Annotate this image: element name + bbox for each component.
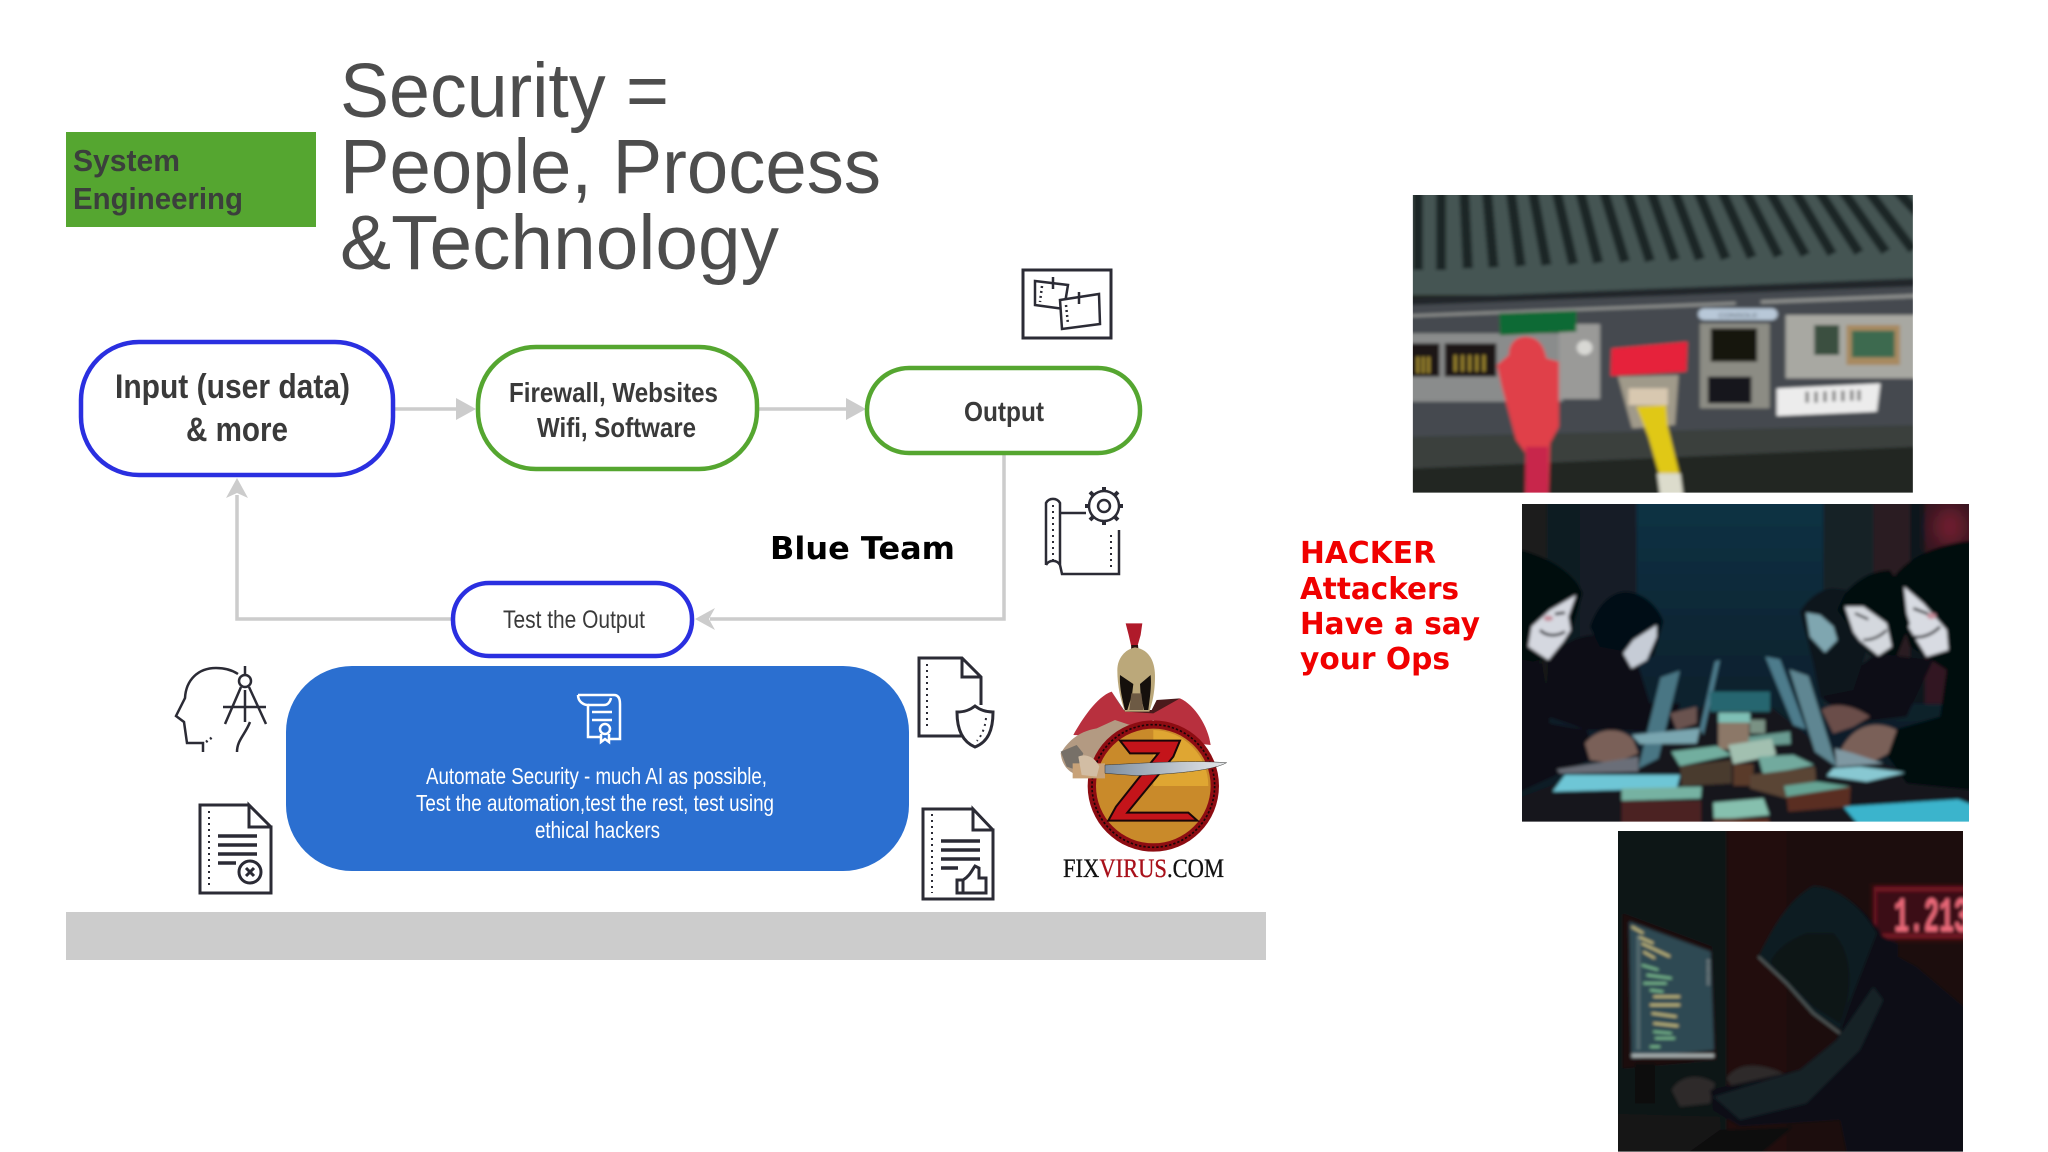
router vented lid (1412, 195, 1913, 298)
tag: System Engineering (66, 132, 316, 227)
callout: hacker attackers: your Ops (1300, 642, 1450, 677)
money stacks (1622, 692, 1851, 838)
icon: head with compass (176, 666, 266, 752)
callout: hacker attackers: Have a say (1300, 607, 1480, 642)
title: People, Process (340, 124, 881, 210)
hacker second left (1547, 592, 1697, 732)
hacker far left (1522, 550, 1640, 790)
hacker back right (1800, 588, 1867, 697)
hacker second right (1820, 570, 1933, 733)
back wall panels (1522, 504, 1969, 706)
panel text (416, 763, 774, 843)
node: Firewall, Websites, Wifi, Software (478, 347, 757, 469)
shield Z letter (1108, 741, 1197, 821)
yellow cable (1636, 405, 1685, 510)
bottom grey bar (66, 912, 1266, 960)
node: Test the Output (453, 583, 692, 656)
laptop right back (1765, 657, 1806, 729)
spartan hand and sword (1073, 763, 1105, 778)
node: Input (user data) & more (81, 342, 393, 475)
label: Blue Team: Blue Team (770, 531, 955, 567)
node: Output (867, 368, 1140, 453)
hacker far right (1838, 540, 1969, 791)
spartan cape (1073, 692, 1211, 745)
spartan arm (1061, 720, 1130, 775)
node: Firewall, Websites, Wifi, Software: Wifi, Software (537, 412, 696, 443)
title (340, 48, 881, 286)
node: Output: Output (964, 396, 1044, 427)
hands (1672, 1066, 1783, 1107)
logo: FixVirus spartan: FIXVIRUS.COM (1063, 854, 1224, 883)
green tape (1499, 311, 1576, 335)
node: Firewall, Websites, Wifi, Software: Firewall, Websites (509, 377, 718, 408)
icon: scroll with gear (1046, 487, 1123, 574)
helmet plume (1126, 623, 1142, 647)
panel text: Test the automation,test the rest, test using (416, 790, 774, 816)
callout: hacker attackers: Attackers (1300, 572, 1459, 607)
node: Test the Output: Test the Output (503, 606, 645, 634)
red tape (1611, 342, 1687, 376)
node: Input (user data) & more: Input (user data) (115, 368, 350, 406)
wall clock: 1.213 (1894, 891, 1969, 948)
router front panel: CONSOLE (1719, 313, 1758, 319)
arrow: test the output back to input (226, 478, 453, 619)
laptop right front (1789, 669, 1883, 767)
arrow: firewall to output (758, 398, 866, 420)
title: &Technology (340, 200, 779, 286)
photo: router with cables (1412, 195, 1913, 493)
tag: System Engineering: Engineering (73, 181, 243, 216)
hooded figure (1710, 886, 1980, 1152)
arrow: input to firewall (394, 398, 476, 420)
panel: automate security (286, 666, 909, 871)
icon: document with shield (919, 658, 993, 747)
panel text: Automate Security - much AI as possible, (426, 763, 767, 789)
tag: System Engineering: System (73, 143, 180, 178)
monitor (1623, 913, 1717, 1103)
desk and keyboard (1618, 1114, 1788, 1152)
wall clock (1867, 883, 1963, 945)
icon: certificate scroll (578, 695, 620, 742)
icon: sticky notes (1023, 270, 1111, 338)
laptop left back (1632, 660, 1720, 744)
node: Input (user data) & more: & more (186, 411, 288, 449)
helmet (1117, 647, 1155, 712)
laptop left front (1557, 671, 1680, 773)
arrow: output to test the output (695, 453, 1004, 630)
photo: hooded hacker at monitor (1618, 831, 1963, 1152)
red cable (1497, 337, 1559, 510)
table (1522, 705, 1969, 822)
title: Security = (340, 48, 669, 134)
panel text: ethical hackers (535, 817, 660, 843)
icon: document with thumbs up (923, 809, 993, 899)
callout: hacker attackers (1300, 536, 1480, 677)
callout: hacker attackers: HACKER (1300, 536, 1436, 571)
shield (1088, 720, 1219, 852)
photo: masked hackers at table (1522, 504, 1969, 822)
icon: document with cross (200, 805, 271, 893)
paper documents (1550, 764, 1969, 822)
logo: FixVirus spartan (1061, 623, 1227, 883)
router front panel (1395, 286, 1932, 469)
